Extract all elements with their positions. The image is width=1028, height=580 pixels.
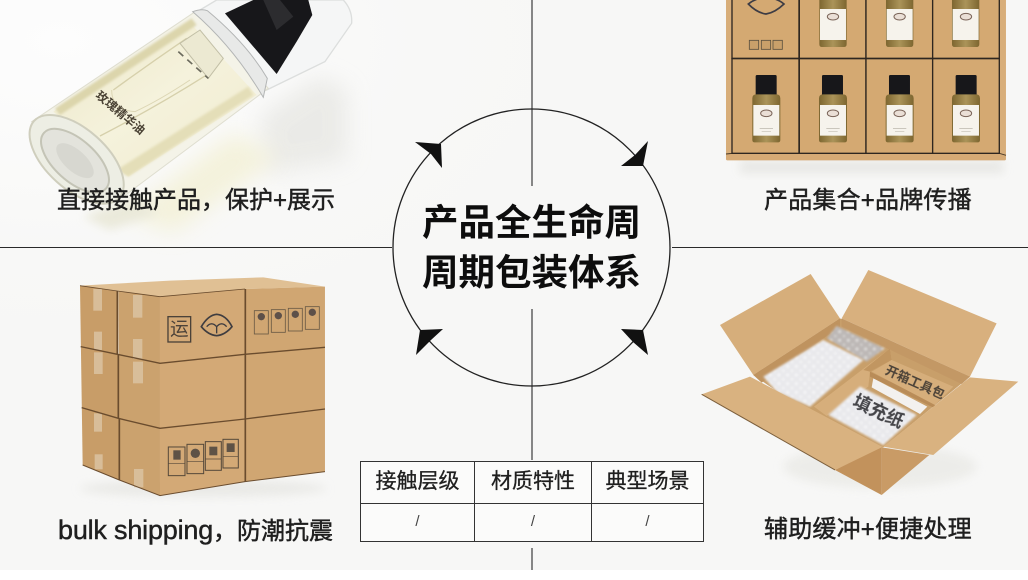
table row: / [645, 513, 650, 530]
arrow: bottom right [621, 329, 648, 355]
carton mark: 运 stamp and logo: 运 [170, 319, 189, 340]
caption: bottom left: bulk shipping，防潮抗震 [58, 515, 333, 545]
image: opened carton with cushioning [702, 270, 1018, 495]
image: glass serum bottle [14, 0, 352, 233]
bottle label text: 玫瑰精华油 [93, 87, 149, 137]
bubble wrap pack, large [763, 340, 863, 407]
caption: top right: 产品集合+品牌传播 [764, 187, 972, 214]
image: stacked shipping cartons [80, 277, 327, 497]
base of bottle [14, 99, 139, 220]
table row: / [415, 513, 420, 530]
table row: / [531, 513, 535, 530]
dip tube and pump [100, 38, 207, 136]
logo on tray lid [748, 0, 784, 14]
arrow: bottom left [416, 329, 443, 355]
table header: 材质特性 [491, 470, 575, 493]
title: 产品全生命周 [422, 202, 641, 243]
clear overcap [200, 0, 352, 90]
bubble wrap pack with print [828, 387, 917, 445]
bubble wrap pack, white [872, 378, 927, 414]
carton mark: 运 stamp and logo [168, 314, 232, 342]
opener tool box: 开箱工具包 [883, 362, 947, 402]
arrow: top right [621, 141, 648, 166]
bubble wrap pack, rear [827, 326, 885, 362]
caption: bottom right: 辅助缓冲+便捷处理 [764, 516, 972, 543]
opener tool box [870, 360, 953, 408]
table header: 典型场景 [606, 470, 690, 493]
table row [415, 504, 650, 541]
table header: 接触层级 [376, 470, 460, 493]
bubble wrap pack with print: 填充纸 [850, 390, 908, 432]
black pump collar [225, 0, 312, 74]
title: 周期包装体系 [422, 252, 641, 293]
glass body [32, 11, 268, 197]
front flaps [702, 377, 883, 470]
caption: top left: 直接接触产品，保护+展示 [57, 187, 335, 214]
carton handling icons, upper [254, 307, 319, 334]
table header [361, 462, 703, 504]
center cycle ring with arrows [393, 109, 670, 386]
table [360, 461, 704, 542]
image: gift tray with eight bottles [726, 0, 1006, 173]
metal ring [193, 10, 267, 97]
carton handling icons, lower [168, 439, 238, 476]
bottle shadow [83, 77, 347, 233]
tray bottles [752, 0, 980, 142]
arrow: top left [415, 142, 442, 168]
cardboard divider [814, 348, 892, 416]
title [422, 202, 641, 293]
